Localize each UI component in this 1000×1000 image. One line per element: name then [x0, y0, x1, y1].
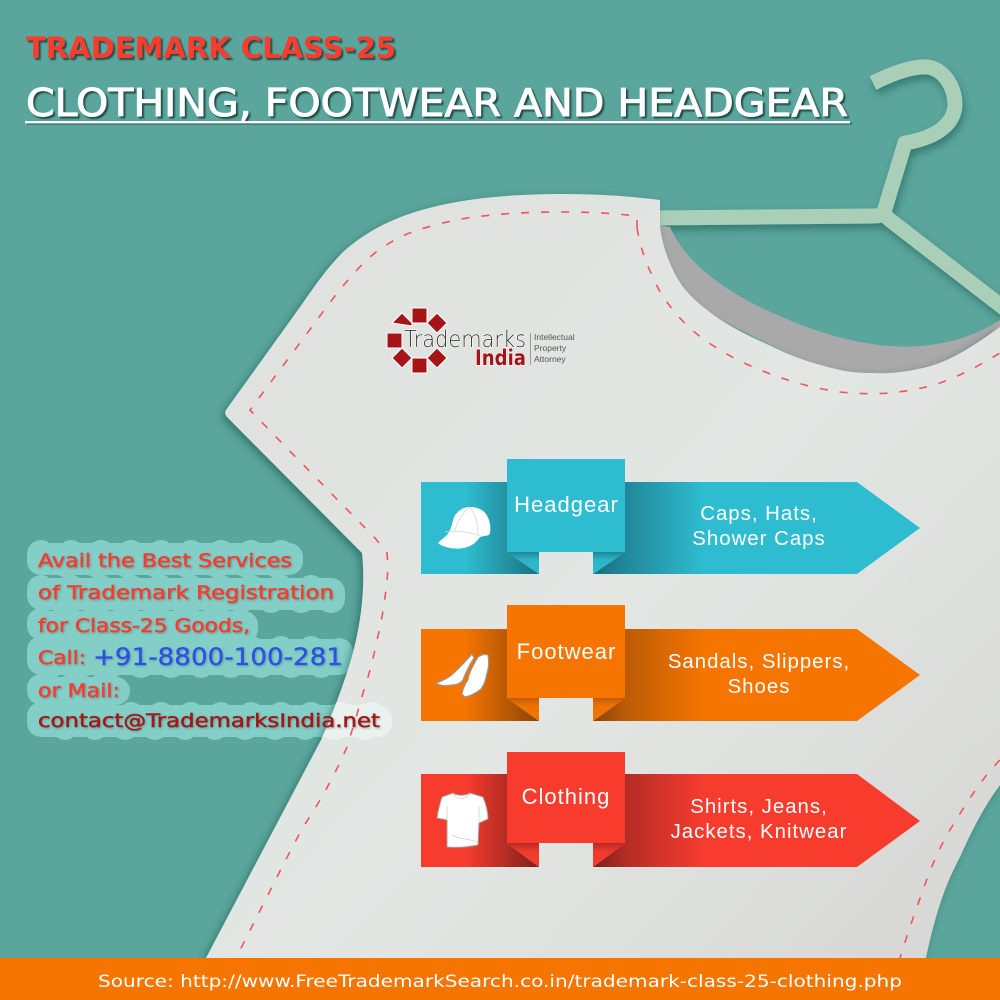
callout text: +91-8800-100-281 — [93, 643, 343, 671]
detail: clothing items: Jackets, Knitwear — [671, 821, 847, 843]
callout text: or Mail: — [38, 680, 120, 702]
icon: cap — [438, 507, 490, 549]
detail: footwear items: Sandals, Slippers, — [668, 651, 850, 673]
logo tagline: Attorney — [534, 354, 566, 364]
title line: clothing footwear and headgear: CLOTHING, FOOTWEAR AND HEADGEAR — [26, 81, 848, 125]
logo wordmark: Trademarks — [404, 327, 526, 353]
detail: headgear items: Shower Caps — [692, 528, 826, 550]
icon: t-shirt — [437, 793, 488, 847]
logo mark — [387, 308, 447, 373]
title line: trademark class: TRADEMARK CLASS-25 — [26, 31, 396, 65]
label: clothing: Clothing — [522, 784, 610, 809]
coat hanger — [655, 67, 1000, 309]
callout text: of Trademark Registration — [38, 582, 334, 604]
callout backdrop on teal — [27, 543, 392, 737]
footer bar — [0, 958, 1000, 1000]
ribbon: clothing — [421, 752, 920, 867]
logo — [387, 308, 575, 373]
callout text — [38, 550, 380, 732]
source text: Source: http://www.FreeTrademarkSearch.co.in/trademark-class-25-clothing.php — [98, 972, 902, 992]
stitching — [236, 212, 1000, 958]
callout backdrop on shirt — [322, 702, 392, 740]
detail: headgear items: Caps, Hats, — [700, 503, 818, 525]
label: footwear: Footwear — [517, 639, 616, 664]
callout text: Avail the Best Services — [38, 550, 292, 572]
icon: heels — [436, 654, 489, 697]
logo tagline: Property — [534, 343, 567, 353]
callout text: for Class-25 Goods, — [38, 615, 250, 637]
ribbon: headgear — [421, 459, 920, 574]
callout text: Call: — [38, 647, 86, 669]
title — [25, 31, 850, 125]
logo tagline: Intellectual — [534, 332, 575, 342]
label: headgear: Headgear — [514, 492, 619, 517]
title underline — [25, 121, 850, 123]
callout text: contact@TrademarksIndia.net — [38, 710, 380, 732]
logo: India — [475, 346, 526, 370]
ribbon: footwear — [421, 605, 920, 721]
shirt body — [206, 194, 1000, 958]
shirt back neck — [658, 225, 1000, 390]
detail: footwear items: Shoes — [728, 676, 790, 698]
detail: clothing items: Shirts, Jeans, — [690, 796, 828, 818]
